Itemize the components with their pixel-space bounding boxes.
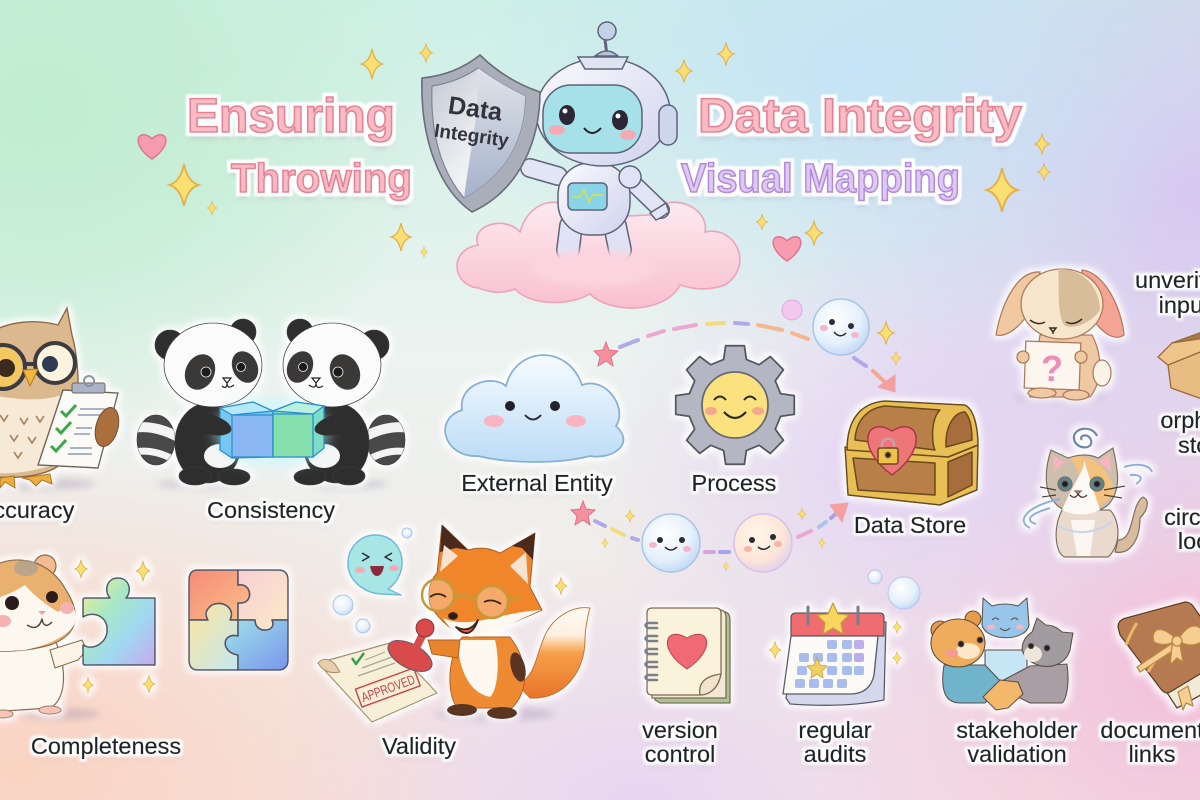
book pages	[1160, 670, 1200, 708]
peach bubble	[734, 514, 792, 572]
blue bubble	[642, 514, 700, 572]
label: Process: Process	[692, 470, 776, 496]
bubbles	[333, 528, 412, 633]
small pink bubble	[782, 300, 802, 320]
panda arms	[182, 408, 364, 440]
four-piece puzzle	[189, 570, 288, 670]
label: unverified inputs	[1135, 267, 1200, 318]
label: document links: links	[1128, 741, 1176, 767]
star marker upper	[594, 342, 618, 366]
upper dashed flow arrow	[620, 323, 887, 384]
process gear	[676, 346, 794, 464]
clipboard	[38, 376, 118, 468]
left tail	[132, 415, 180, 465]
regular audits calendar	[769, 603, 902, 705]
data flow: external entity cloud	[445, 355, 623, 462]
bunny paws and feet	[1017, 351, 1089, 400]
approved stamp text: APPROVED	[359, 672, 417, 705]
upper arrowhead	[878, 375, 895, 392]
fox chest	[457, 640, 498, 697]
version control notebook	[646, 608, 730, 703]
owl body	[0, 308, 78, 477]
title: Throwing: Throwing	[231, 155, 412, 201]
pandas: Consistency	[132, 319, 410, 485]
back pages	[786, 622, 886, 705]
bunny face	[1030, 319, 1082, 334]
calendar stars	[807, 603, 849, 678]
swirl above cat	[1074, 429, 1097, 447]
robot shoulder	[619, 166, 641, 188]
title: Ensuring: Ensuring	[187, 90, 395, 143]
right tail	[362, 415, 410, 465]
bow ribbon	[1137, 626, 1200, 672]
back pages	[655, 612, 730, 703]
hamster paw	[50, 640, 87, 668]
label: circular loops	[1164, 504, 1200, 554]
owl glasses	[0, 343, 75, 389]
approved scroll	[318, 643, 437, 722]
gear smiley face	[702, 372, 768, 438]
robot antenna	[595, 22, 618, 56]
data store treasure chest	[845, 401, 978, 505]
right torso	[303, 403, 369, 483]
bear head	[931, 611, 985, 667]
handshake	[983, 680, 1023, 710]
calendar grid	[795, 640, 864, 688]
lower arrowhead	[830, 503, 848, 522]
red header	[791, 613, 884, 636]
fox: Validity	[318, 525, 590, 722]
cat head	[1046, 448, 1118, 513]
glowing cubes	[214, 396, 330, 468]
cat body	[1056, 510, 1118, 557]
bubbles near calendar	[868, 570, 920, 609]
lower dashed flow arrow	[595, 512, 838, 552]
calendar side sparkles	[769, 620, 902, 664]
label: version control	[642, 717, 718, 767]
document links book	[1118, 602, 1200, 710]
chest lid	[847, 401, 978, 457]
spiral binding	[646, 623, 657, 680]
sparkles	[75, 560, 155, 692]
owl beak	[23, 369, 38, 386]
shield text: Integrity	[433, 121, 510, 152]
label: External Entity: External Entity	[461, 470, 613, 496]
owl: Accuracy	[0, 308, 123, 488]
motion swooshes	[1024, 465, 1152, 532]
shield text: Data	[446, 91, 505, 127]
cat: circular loops	[1024, 429, 1152, 557]
label: version control: control	[645, 741, 715, 767]
fox ears	[440, 525, 535, 584]
calendar rings	[808, 607, 858, 624]
cat face	[1040, 477, 1125, 498]
label: Consistency: Consistency	[207, 497, 335, 523]
hamster face	[0, 560, 76, 651]
bookmark	[1178, 686, 1193, 710]
robot hand	[650, 203, 669, 220]
label: regular audits	[798, 717, 872, 767]
speech bubble	[348, 535, 402, 595]
label: orphaned stores	[1160, 407, 1200, 458]
hamster feet	[0, 706, 61, 718]
rainbow puzzle piece	[83, 578, 155, 665]
label: document links	[1100, 717, 1200, 767]
label: version control: version	[642, 717, 718, 743]
bunny ears	[996, 270, 1124, 337]
label: stakeholder validation: validation	[967, 741, 1067, 767]
robot arms	[530, 168, 661, 210]
title: Visual Mapping: Visual Mapping	[681, 155, 960, 201]
fox feet and arm	[447, 651, 529, 719]
label: regular audits: audits	[804, 741, 866, 767]
fox head	[429, 525, 542, 637]
label: Completeness: Completeness	[31, 733, 181, 759]
header sparkles and hearts	[138, 42, 1050, 261]
fox muzzle	[443, 610, 541, 637]
cat tail	[1115, 497, 1147, 552]
spine bands	[1126, 623, 1160, 672]
fox tail	[518, 608, 590, 698]
label: regular audits: regular	[798, 717, 872, 743]
owl belly	[0, 392, 64, 473]
left torso	[175, 403, 241, 483]
label: stakeholder validation: stakeholder	[956, 717, 1078, 743]
right panda	[282, 319, 410, 485]
blue sweater bear body and arm	[943, 665, 1005, 703]
bunny body	[1030, 335, 1100, 397]
smiling bubbles	[602, 299, 901, 572]
page curl	[700, 674, 721, 695]
top bubble	[813, 299, 869, 355]
bunny head	[1021, 269, 1103, 339]
hamster ear	[34, 555, 56, 577]
question sign: ?	[1041, 348, 1063, 389]
fox raised arm	[428, 640, 460, 658]
grey cat body and arm	[1000, 664, 1068, 703]
robot chest screen	[568, 183, 607, 210]
owl wing hand	[91, 405, 123, 449]
robot body	[558, 163, 630, 235]
fox body	[450, 637, 525, 708]
owl feet	[0, 474, 52, 488]
hamster head	[0, 560, 75, 651]
cardboard box	[1158, 331, 1200, 400]
stakeholder animals	[931, 598, 1073, 710]
label: stakeholder validation	[956, 717, 1078, 767]
grey cat head	[1022, 618, 1073, 666]
bunny: unverified inputs	[996, 269, 1124, 400]
label: Data Store: Data Store	[854, 512, 966, 538]
pink cloud	[457, 202, 740, 308]
fox smile	[430, 594, 501, 633]
hamster: Completeness	[0, 555, 155, 718]
heart	[667, 634, 707, 669]
robot head	[536, 57, 677, 166]
shield	[422, 55, 540, 212]
labels	[0, 267, 1200, 767]
red stamp	[383, 619, 437, 678]
hamster body	[0, 640, 64, 712]
calendar page	[783, 636, 878, 694]
owl feather marks	[0, 415, 44, 458]
cloud face	[484, 401, 586, 427]
robot legs	[568, 226, 620, 250]
flow sparkles	[602, 322, 901, 570]
book cover	[1118, 602, 1200, 693]
chest base	[845, 445, 978, 505]
title: Data Integrity: Data Integrity	[698, 90, 1022, 143]
cat ears inner	[1053, 454, 1111, 472]
left panda	[132, 319, 263, 485]
star marker lower	[571, 501, 595, 525]
shadows under characters	[0, 392, 1105, 721]
label: Validity: Validity	[382, 733, 456, 759]
front page	[647, 608, 721, 695]
shield text	[433, 90, 515, 152]
blue cat	[982, 598, 1029, 685]
cloud front puff	[533, 250, 657, 286]
fox glasses	[422, 579, 522, 618]
heart lock	[868, 427, 916, 475]
robot mascot	[530, 22, 677, 250]
